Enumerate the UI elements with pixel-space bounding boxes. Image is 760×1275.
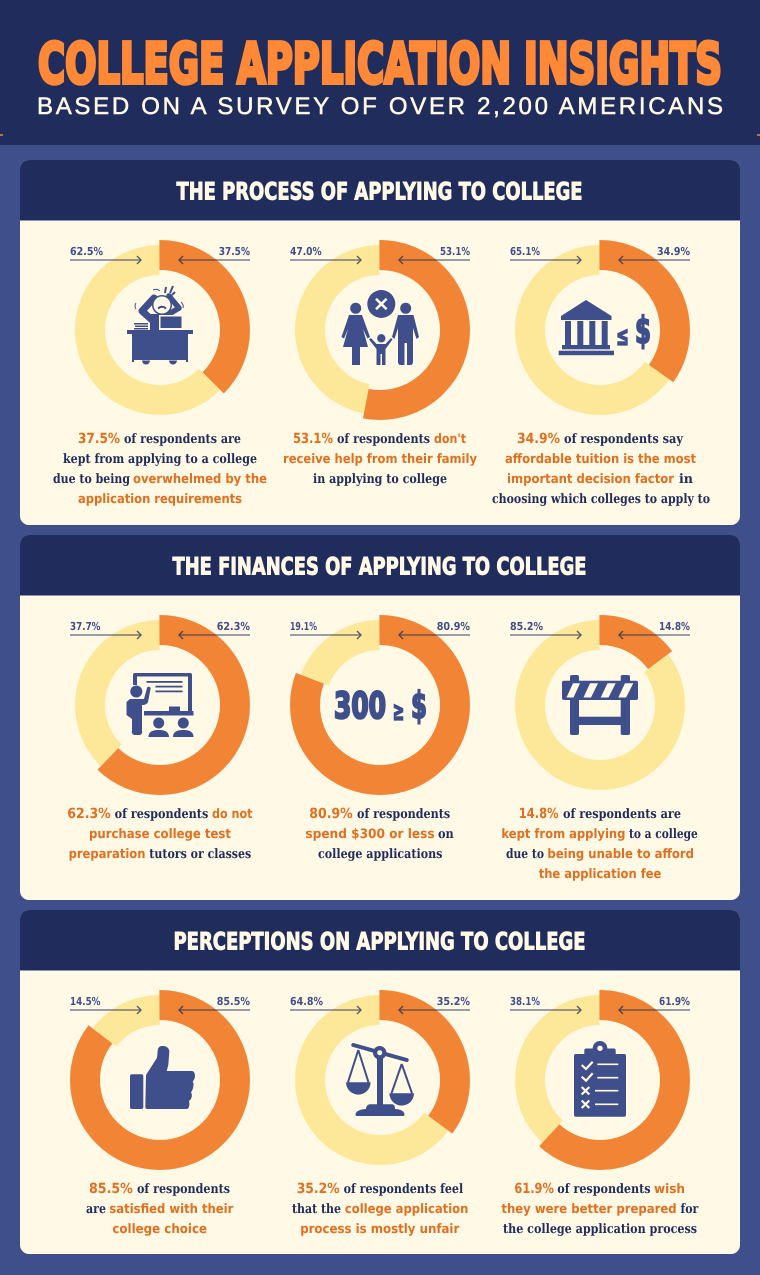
caption: 62.3 percent: tutors or classes — [149, 847, 251, 862]
icon: tilted balance scales — [346, 1045, 414, 1116]
heading: finances: THE FINANCES OF APPLYING TO COLLEGE — [172, 552, 586, 580]
caption: 80.9 percent: on — [438, 827, 454, 842]
caption: 14.8 percent: due to — [506, 847, 544, 862]
caption: 80.9 percent: college applications — [318, 847, 442, 862]
caption: 53.1 percent: of respondents — [337, 432, 430, 447]
donut chart: 14.8 percent unable to afford fee — [510, 620, 690, 780]
caption: 62.3 percent: purchase college test — [89, 827, 231, 842]
caption: 80.9 percent: of respondents — [357, 807, 450, 822]
caption: 14.8 percent: the application fee — [539, 867, 662, 882]
donut chart: 80.9 percent spend 300 or less: 80.9% — [437, 620, 470, 633]
donut chart: 85.5 percent satisfied: 85.5% — [217, 995, 250, 1008]
donut chart: 80.9 percent spend 300 or less — [290, 620, 470, 780]
donut chart: 35.2 percent feel unfair — [290, 995, 470, 1155]
caption: 14.8 percent: of respondents are — [563, 807, 681, 822]
heading: perceptions: PERCEPTIONS ON APPLYING TO COLLEGE — [174, 928, 586, 956]
icon: road barricade — [562, 675, 638, 735]
caption: 35.2 percent: process is mostly unfair — [300, 1222, 460, 1237]
caption: 37.5 percent — [53, 431, 267, 507]
caption: 34.9 percent: in — [679, 472, 694, 487]
donut chart: 35.2 percent feel unfair: 64.8% — [290, 995, 323, 1008]
icon: 300 greater than or equal to dollar: 300 — [334, 686, 386, 727]
caption: 14.8 percent: kept from applying — [501, 827, 625, 842]
icon: 300 greater than or equal to dollar: ≥ — [392, 696, 404, 727]
icon: family with x — [342, 290, 419, 365]
donut chart: 61.9 percent better prepared: 38.1% — [510, 995, 540, 1008]
donut chart: 34.9 percent affordable tuition — [510, 245, 690, 405]
panel: perceptions on applying to college — [20, 910, 740, 1254]
caption: 85.5 percent: college choice — [112, 1222, 207, 1237]
donut chart: 14.8 percent unable to afford fee: 14.8% — [659, 620, 690, 633]
icon: clipboard checklist — [574, 1041, 626, 1117]
caption: 35.2 percent: college application — [345, 1202, 468, 1217]
caption: 85.5 percent: of respondents — [137, 1182, 230, 1197]
caption: 85.5 percent: satisfied with their — [109, 1202, 234, 1217]
caption: 35.2 percent: 35.2% — [297, 1181, 340, 1197]
caption: 34.9 percent: important decision factor — [507, 472, 675, 487]
caption: 37.5 percent: overwhelmed by the — [133, 472, 267, 487]
caption: 34.9 percent: of respondents say — [564, 432, 683, 447]
caption: 37.5 percent: application requirements — [78, 492, 242, 507]
donut chart: 62.3 percent no test prep: 62.3% — [217, 620, 250, 633]
icon: 300 greater than or equal to dollar: $ — [411, 684, 427, 727]
caption: 37.5 percent: kept from applying to a college — [63, 452, 257, 467]
caption: 80.9 percent: spend $300 or less — [305, 827, 435, 842]
caption: 14.8 percent — [501, 806, 698, 882]
caption: 53.1 percent: don't — [434, 432, 466, 447]
caption: 37.5 percent: of respondents are — [124, 432, 241, 447]
panel: the process of applying to college — [20, 160, 740, 525]
donut chart: 34.9 percent affordable tuition: 34.9% — [657, 245, 690, 258]
caption: 35.2 percent: that the — [292, 1202, 341, 1217]
donut chart: 53.1 percent no family help — [290, 245, 470, 405]
donut chart: 37.5 percent overwhelmed: 62.5% — [70, 245, 103, 258]
caption: 53.1 percent — [283, 431, 477, 487]
caption: 85.5 percent: are — [86, 1202, 106, 1217]
caption: 35.2 percent: of respondents feel — [344, 1182, 463, 1197]
caption: 61.9 percent: 61.9% — [514, 1181, 554, 1197]
caption: 62.3 percent: of respondents — [115, 807, 208, 822]
donut chart: 61.9 percent better prepared: 61.9% — [659, 995, 690, 1008]
caption: 34.9 percent: 34.9% — [517, 431, 560, 447]
caption: 80.9 percent — [305, 806, 454, 862]
donut chart: 14.8 percent unable to afford fee: 85.2% — [510, 620, 543, 633]
icon: stressed student at desk — [127, 286, 193, 364]
donut chart: 80.9 percent spend 300 or less: 19.1% — [290, 620, 317, 633]
caption: 34.9 percent — [492, 431, 710, 507]
icon: teacher with board and students — [126, 673, 194, 737]
caption: 34.9 percent: affordable tuition is the most — [505, 452, 696, 467]
caption: 61.9 percent: the college application process — [503, 1222, 697, 1237]
icon: college building less than or equal to dollar — [559, 300, 651, 355]
caption: 34.9 percent: choosing which colleges to apply to — [492, 492, 710, 507]
caption: 61.9 percent: for — [680, 1202, 698, 1217]
caption: 53.1 percent: in applying to college — [313, 472, 447, 487]
icon: college building less than or equal to dollar: ≤ — [616, 321, 629, 352]
caption: 62.3 percent — [67, 806, 252, 862]
heading: process: THE PROCESS OF APPLYING TO COLLEGE — [176, 178, 582, 206]
donut chart: 35.2 percent feel unfair: 35.2% — [437, 995, 470, 1008]
caption: 61.9 percent: they were better prepared — [501, 1202, 677, 1217]
caption: 37.5 percent: 37.5% — [78, 431, 120, 447]
donut chart: 85.5 percent satisfied: 14.5% — [70, 995, 100, 1008]
caption: 80.9 percent: 80.9% — [309, 806, 353, 822]
subtitle: BASED ON A SURVEY OF OVER 2,200 AMERICANS — [37, 93, 723, 120]
donut chart: 53.1 percent no family help: 47.0% — [290, 245, 322, 258]
donut chart: 37.5 percent overwhelmed: 37.5% — [219, 245, 250, 258]
caption: 14.8 percent: being unable to afford — [547, 847, 694, 862]
header banner — [0, 0, 760, 145]
caption: 85.5 percent — [86, 1181, 234, 1237]
caption: 61.9 percent — [501, 1181, 698, 1237]
caption: 14.8 percent: to a college — [629, 827, 698, 842]
caption: 53.1 percent: receive help from their family — [283, 452, 477, 467]
caption: 61.9 percent: of respondents — [557, 1182, 651, 1197]
icon: thumbs up — [130, 1046, 195, 1109]
donut chart: 34.9 percent affordable tuition: 65.1% — [510, 245, 540, 258]
caption: 35.2 percent — [292, 1181, 468, 1237]
icon: college building less than or equal to dollar: $ — [635, 309, 651, 352]
donut chart: 62.3 percent no test prep: 37.7% — [70, 620, 100, 633]
caption: 61.9 percent: wish — [654, 1182, 685, 1197]
caption: 37.5 percent: due to being — [53, 472, 130, 487]
donut chart: 61.9 percent better prepared — [510, 995, 690, 1155]
caption: 85.5 percent: 85.5% — [89, 1181, 133, 1197]
donut chart: 85.5 percent satisfied — [70, 995, 250, 1155]
caption: 62.3 percent: 62.3% — [67, 806, 111, 822]
caption: 62.3 percent: do not — [212, 807, 252, 822]
donut chart: 37.5 percent overwhelmed — [70, 245, 250, 405]
donut chart: 62.3 percent no test prep — [70, 620, 250, 780]
caption: 14.8 percent: 14.8% — [519, 806, 559, 822]
caption: 62.3 percent: preparation — [69, 847, 145, 862]
donut chart: 53.1 percent no family help: 53.1% — [440, 245, 470, 258]
panel: the finances of applying to college — [20, 535, 740, 900]
caption: 53.1 percent: 53.1% — [293, 431, 333, 447]
